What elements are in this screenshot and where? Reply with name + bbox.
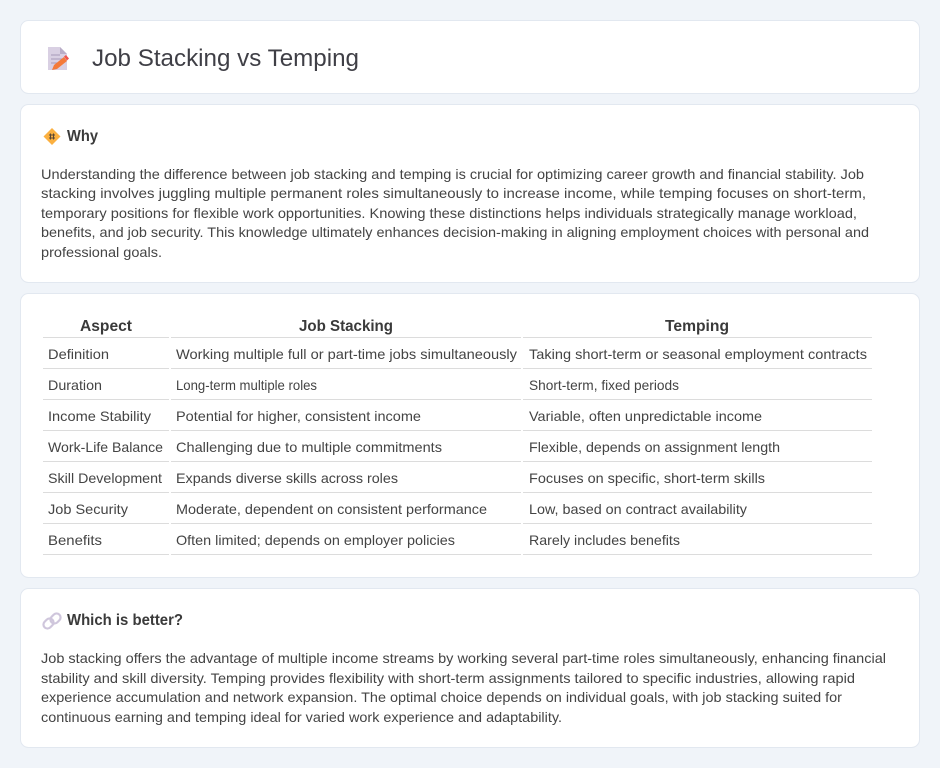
row: income stability: Potential for higher, consistent income	[176, 408, 421, 424]
row: skill development: Skill Development	[48, 470, 162, 486]
heading: why: Why	[67, 128, 98, 145]
text block: why paragraph: professional goals.	[41, 244, 162, 260]
text block: why paragraph: stacking involves juggling multiple permanent roles simultaneously to increase income, while temping focuses on short-term,	[41, 185, 866, 201]
text block: why paragraph: Understanding the difference between job stacking and temping is crucial for optimizing career growth and financial stability. Job	[41, 166, 864, 182]
panel: comparison table	[20, 294, 920, 578]
row: job security: Moderate, dependent on consistent performance	[176, 501, 487, 517]
text block: why paragraph	[41, 166, 869, 260]
row: job security: Job Security	[48, 501, 128, 517]
row: work-life balance: Flexible, depends on assignment length	[529, 439, 780, 455]
table header row: Aspect	[80, 318, 133, 335]
row: definition	[48, 346, 867, 362]
text block: why paragraph: benefits, and job security. This knowledge ultimately enhances decision-making in aligning employment choices with personal and	[41, 224, 869, 240]
row: income stability	[48, 408, 762, 424]
row: definition: Definition	[48, 346, 109, 362]
row: skill development	[48, 470, 765, 486]
panel: title header	[20, 20, 920, 94]
panel: which is better	[20, 588, 920, 748]
row: duration	[48, 377, 679, 393]
text block: which paragraph: Job stacking offers the advantage of multiple income streams by working several part-time roles simultaneously, enhancing financial	[41, 650, 886, 666]
row: skill development: Focuses on specific, short-term skills	[529, 470, 765, 486]
row: income stability: Income Stability	[48, 408, 151, 424]
row: work-life balance	[48, 439, 780, 455]
row: benefits	[48, 532, 680, 548]
icon: document with pencil	[48, 47, 69, 70]
row: duration: Short-term, fixed periods	[529, 377, 679, 393]
row: skill development: Expands diverse skills across roles	[176, 470, 398, 486]
table header row: Temping	[665, 318, 729, 335]
table header row: Job Stacking	[299, 318, 393, 335]
row: benefits: Often limited; depends on employer policies	[176, 532, 455, 548]
text block: which paragraph: experience accumulation and network expansion. The optimal choice depends on individual goals, with job stacking suited for	[41, 689, 842, 705]
row: benefits: Benefits	[48, 532, 102, 548]
heading: which is better: Which is better?	[67, 612, 183, 629]
row: income stability: Variable, often unpredictable income	[529, 408, 762, 424]
row: definition: Taking short-term or seasonal employment contracts	[529, 346, 867, 362]
row: job security: Low, based on contract availability	[529, 501, 747, 517]
text block: which paragraph: continuous earning and temping ideal for varied work experience and adaptability.	[41, 709, 562, 725]
panel: why	[20, 104, 920, 282]
row: definition: Working multiple full or part-time jobs simultaneously	[176, 346, 517, 362]
title: Job Stacking vs Temping	[92, 45, 359, 72]
row: benefits: Rarely includes benefits	[529, 532, 680, 548]
row: work-life balance: Work-Life Balance	[48, 439, 163, 455]
row: duration: Long-term multiple roles	[176, 377, 317, 393]
row: duration: Duration	[48, 377, 102, 393]
text block: why paragraph: temporary positions for flexible work opportunities. Knowing these distinctions helps individuals strategically manage workload,	[41, 205, 857, 221]
row: job security	[48, 501, 747, 517]
text block: which paragraph: stability and skill diversity. Temping provides flexibility with short-term assignments tailored to specific industries, allowing rapid	[41, 670, 855, 686]
table header row	[80, 318, 729, 335]
text block: which paragraph	[41, 650, 886, 725]
row: work-life balance: Challenging due to multiple commitments	[176, 439, 442, 455]
icon: chain link	[42, 612, 62, 630]
icon: warning diamond	[44, 128, 60, 145]
